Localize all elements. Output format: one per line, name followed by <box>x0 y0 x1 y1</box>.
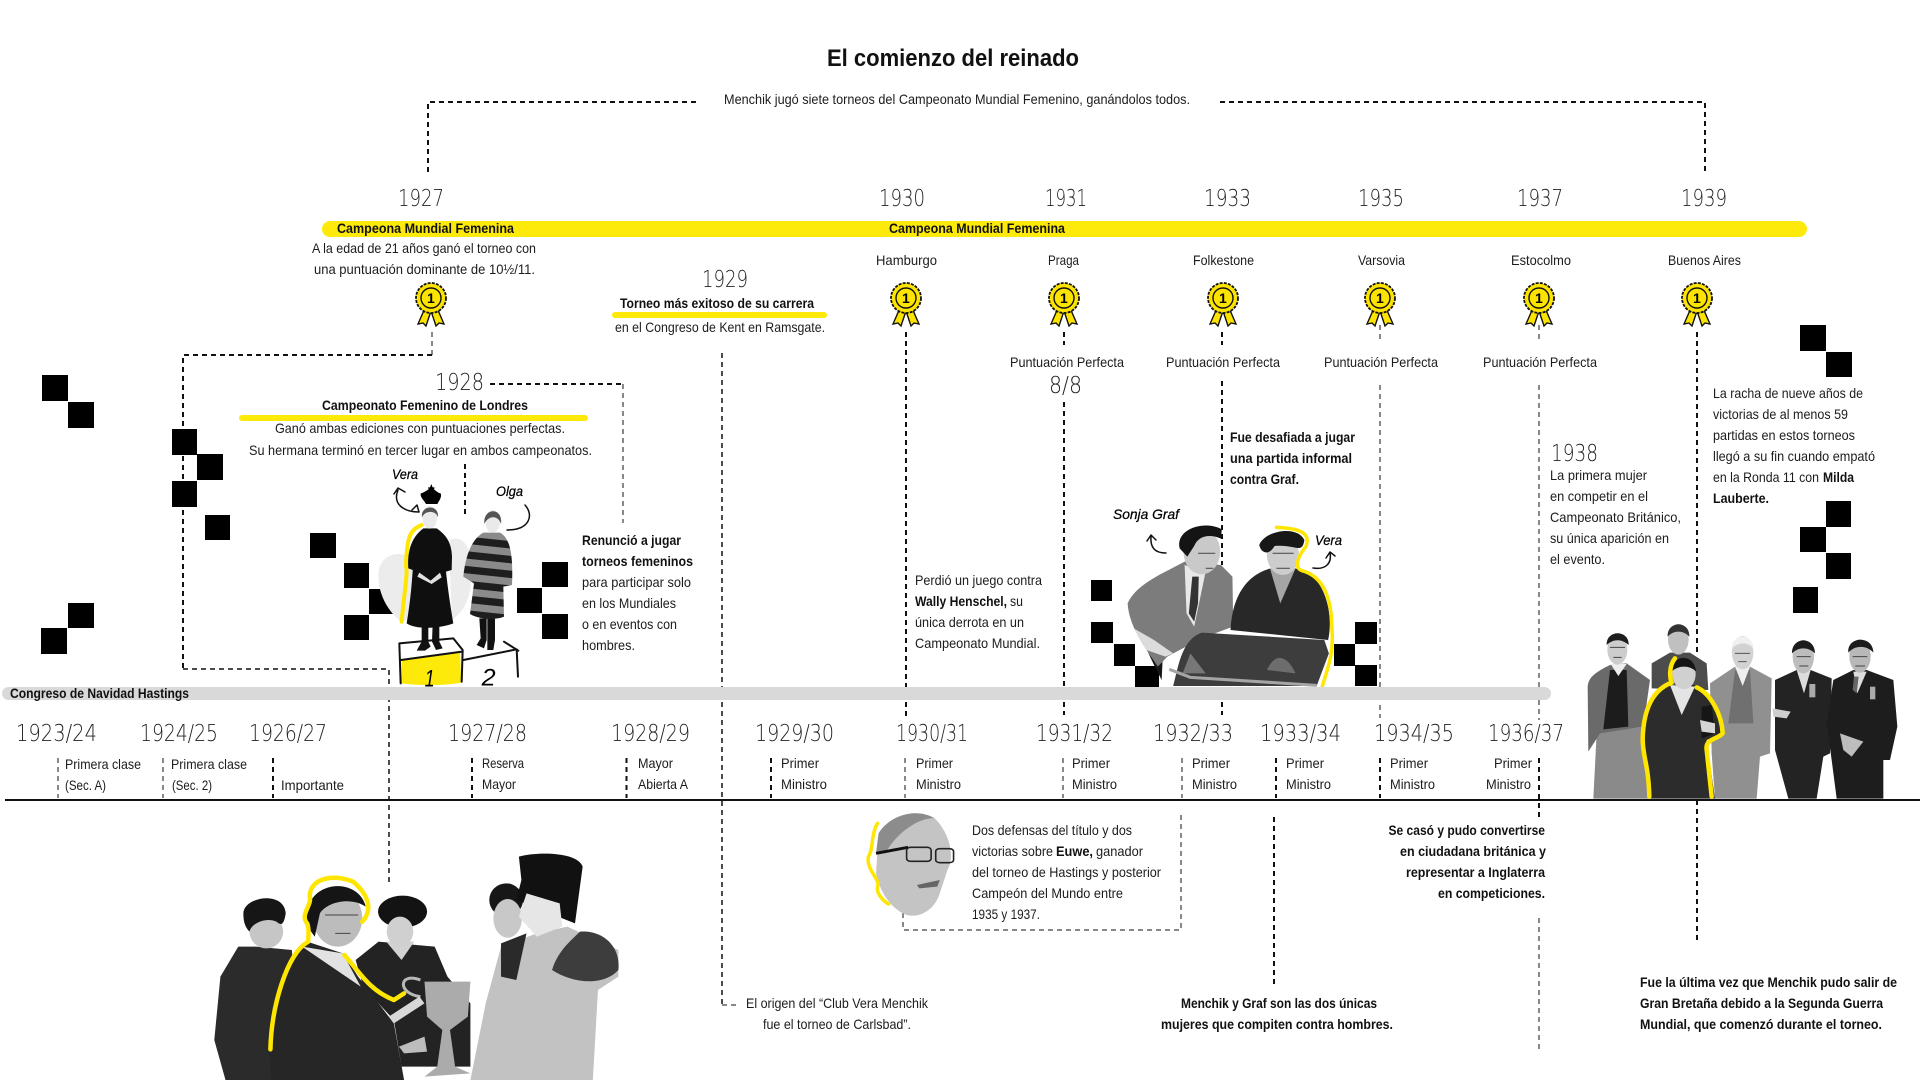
perfect score labels: Puntuación Perfecta <box>1166 354 1280 370</box>
text: nine-year streak <box>1713 385 1875 506</box>
icon: medal 1931: 1 <box>1060 290 1068 306</box>
icon: medal 1939: 1 <box>1693 290 1701 306</box>
figure: woman right of Vera <box>356 896 470 1067</box>
figure: man right <box>1827 639 1897 799</box>
season result labels: Mayor <box>638 755 673 771</box>
figure: Sonja Graf <box>1128 526 1233 680</box>
dashed connectors <box>183 325 1697 1053</box>
season result labels: Importante <box>281 777 344 793</box>
title: El comienzo del reinado <box>827 45 1079 72</box>
photo: group of six chess players <box>1588 624 1897 799</box>
text: nine-year streak: victorias de al menos 59 <box>1713 406 1848 422</box>
text: 1927 description: una puntuación dominante de 10½/11. <box>314 261 535 277</box>
block: 1928 London championship: Ganó ambas ediciones con puntuaciones perfectas. <box>275 420 565 436</box>
text: gave up women's tournaments: torneos femeninos <box>582 553 693 569</box>
text: gave up women's tournaments: en los Mundiales <box>582 595 676 611</box>
season result labels: Ministro <box>1286 776 1331 792</box>
icon: medal 1933 <box>1208 283 1238 326</box>
season result labels: Ministro <box>1390 776 1435 792</box>
icon: medal 1930: 1 <box>902 290 910 306</box>
season year labels: 1933/34 <box>1260 721 1341 747</box>
season year labels: 1927/28 <box>448 721 527 747</box>
icon: chess queen crown <box>421 484 441 504</box>
season result labels: Ministro <box>1072 776 1117 792</box>
text: lost one game: su <box>1010 593 1023 609</box>
text: 1938 British Championship: Campeonato Británico, <box>1550 509 1681 525</box>
text: lost one game: Campeonato Mundial. <box>915 635 1040 651</box>
icon: medal 1927 <box>416 283 446 326</box>
season result dividers <box>58 758 1539 798</box>
photo: Vera and Olga on the podium <box>378 506 518 693</box>
top year labels <box>398 186 1727 212</box>
text: Euwe victories: Dos defensas del título y dos <box>972 822 1132 838</box>
yellow bar: Campeona Mundial Femenina <box>322 220 1807 237</box>
text: Euwe victories: victorias sobre <box>972 843 1053 859</box>
text: British citizenship: en competiciones. <box>1438 885 1545 901</box>
text: nine-year streak: La racha de nueve años de <box>1713 385 1863 401</box>
text: lost one game <box>915 572 1042 651</box>
figure: trophy <box>389 978 470 1077</box>
figure: man arms crossed <box>1773 640 1832 799</box>
figure: Vera highlighted <box>269 878 404 1080</box>
icon: medal 1935: 1 <box>1376 290 1384 306</box>
season year labels: 1932/33 <box>1153 721 1233 747</box>
hand label: Vera with arrow <box>1313 532 1342 568</box>
text: nine-year streak: Lauberte. <box>1713 490 1769 506</box>
text: Euwe victories <box>972 822 1161 922</box>
city labels: Praga <box>1048 252 1079 268</box>
text: 1938 British Championship: La primera mujer <box>1550 467 1647 483</box>
checker squares <box>41 325 1852 687</box>
season result labels: (Sec. 2) <box>172 777 212 793</box>
icon: medal 1937 <box>1524 283 1554 326</box>
grey bar: Congreso de Navidad Hastings <box>2 685 1551 701</box>
top year labels: 1935 <box>1358 186 1404 212</box>
icon: medal 1931 <box>1049 283 1079 326</box>
season result labels: Abierta A <box>638 776 689 792</box>
season year labels: 1936/37 <box>1488 721 1564 747</box>
perfect score labels: Puntuación Perfecta <box>1010 354 1124 370</box>
season year labels: 1923/24 <box>16 721 97 747</box>
top year labels: 1937 <box>1517 186 1563 212</box>
icon: medal 1933: 1 <box>1219 290 1227 306</box>
text: Menchik and Graf: Menchik y Graf son las dos únicas <box>1181 995 1377 1011</box>
text: last time abroad: Mundial, que comenzó durante el torneo. <box>1640 1016 1882 1032</box>
text: gave up women's tournaments: para participar solo <box>582 574 691 590</box>
top year labels: 1931 <box>1045 186 1087 212</box>
figure: Olga <box>463 510 512 650</box>
season result labels: Primer <box>1286 755 1324 771</box>
text: 1938 British Championship: en competir en el <box>1550 488 1648 504</box>
text: last time abroad: Gran Bretaña debido a la Segunda Guerra <box>1640 995 1883 1011</box>
season result labels: Ministro <box>1486 776 1531 792</box>
text: British citizenship: Se casó y pudo convertirse <box>1388 822 1545 838</box>
season year labels: 1924/25 <box>140 721 218 747</box>
text: nine-year streak: Milda <box>1823 469 1854 485</box>
figure: woman behind right <box>489 883 523 938</box>
text: gave up women's tournaments: Renunció a jugar <box>582 532 681 548</box>
icon: medal 1935 <box>1365 283 1395 326</box>
text: lost one game: única derrota en un <box>915 614 1024 630</box>
icon: medal 1927: 1 <box>427 290 435 306</box>
season result labels: Ministro <box>781 776 827 792</box>
text: nine-year streak: partidas en estos torneos <box>1713 427 1855 443</box>
season result labels: Primer <box>1072 755 1110 771</box>
text: 1927 description <box>312 240 536 277</box>
text: British citizenship: en ciudadana británica y <box>1400 843 1546 859</box>
grey bar: Congreso de Navidad Hastings: Congreso de Navidad Hastings <box>10 685 189 701</box>
perfect score labels: Puntuación Perfecta <box>1324 354 1438 370</box>
figure: Vera highlighted <box>1643 658 1723 799</box>
season result labels: Primera clase <box>65 756 141 772</box>
text: 1938 British Championship: 1938 <box>1551 441 1598 467</box>
text: nine-year streak: en la Ronda 11 con <box>1713 469 1819 485</box>
top year labels: 1930 <box>879 186 925 212</box>
baseline rule <box>5 799 1920 801</box>
season year labels: 1930/31 <box>896 721 968 747</box>
yellow bar: Campeona Mundial Femenina: Campeona Mundial Femenina <box>337 220 514 236</box>
photo: women with trophy <box>214 854 619 1080</box>
connector: subtitle bracket <box>428 102 1705 176</box>
season year labels: 1926/27 <box>249 721 327 747</box>
block: 1929 Kent congress: 1929 <box>702 267 748 293</box>
season result labels: Primer <box>1494 755 1532 771</box>
text: 1938 British Championship <box>1550 441 1681 567</box>
season year labels: 1934/35 <box>1374 721 1454 747</box>
figure: Vera <box>407 506 453 651</box>
photo: Euwe head <box>868 813 954 916</box>
text: Club Vera Menchik origin: El origen del “Club Vera Menchik <box>746 995 929 1011</box>
text: last time abroad <box>1640 974 1897 1032</box>
perfect score labels: Puntuación Perfecta <box>1483 354 1597 370</box>
text: gave up women's tournaments: hombres. <box>582 637 635 653</box>
text: challenged to informal game: una partida informal <box>1230 450 1352 466</box>
city labels: Buenos Aires <box>1668 252 1741 268</box>
text: British citizenship: representar a Inglaterra <box>1406 864 1545 880</box>
text: Menchik and Graf <box>1161 995 1393 1032</box>
block: 1929 Kent congress: en el Congreso de Kent en Ramsgate. <box>615 319 825 335</box>
text: Menchik and Graf: mujeres que compiten contra hombres. <box>1161 1016 1393 1032</box>
city labels: Varsovia <box>1358 252 1405 268</box>
podium <box>399 638 518 693</box>
subtitle: seven world championships: Menchik jugó siete torneos del Campeonato Mundial Femenino, ganándolos todos. <box>724 91 1190 107</box>
block: 1928 London championship <box>239 370 592 458</box>
figure: woman with tall hat <box>470 854 619 1080</box>
figure: man with glasses <box>1588 633 1650 799</box>
season result labels: Ministro <box>1192 776 1237 792</box>
text: lost one game: Perdió un juego contra <box>915 572 1042 588</box>
top year labels: 1927 <box>398 186 444 212</box>
hand label: Vera with arrow: Vera <box>1315 532 1342 548</box>
city labels: Folkestone <box>1193 252 1254 268</box>
photo: Sonja Graf and Vera at table <box>1128 526 1332 686</box>
hand label: Sonja Graf with arrow: Sonja Graf <box>1113 506 1181 522</box>
text: British citizenship <box>1388 822 1546 901</box>
season result labels: Ministro <box>916 776 961 792</box>
podium: 1 <box>425 666 435 693</box>
hand label: Vera with arrow <box>392 466 419 512</box>
yellow bar: Campeona Mundial Femenina: Campeona Mundial Femenina <box>889 220 1065 236</box>
season result labels: Primer <box>1192 755 1230 771</box>
season result labels: Mayor <box>482 776 516 792</box>
text: nine-year streak: llegó a su fin cuando empató <box>1713 448 1875 464</box>
season year labels: 1929/30 <box>755 721 834 747</box>
text: challenged to informal game: Fue desafiada a jugar <box>1230 429 1355 445</box>
city labels: Hamburgo <box>876 252 937 268</box>
block: 1928 London championship: Campeonato Femenino de Londres <box>322 397 528 413</box>
text: Euwe victories: del torneo de Hastings y posterior <box>972 864 1161 880</box>
text: Euwe victories: Euwe, <box>1056 843 1093 859</box>
block: 1929 Kent congress: Torneo más exitoso de su carrera <box>620 295 814 311</box>
season result labels <box>65 755 1532 793</box>
season year labels: 1928/29 <box>611 721 690 747</box>
block: 1928 London championship: 1928 <box>435 370 484 396</box>
block: 1928 London championship: Su hermana terminó en tercer lugar en ambos campeonatos. <box>249 442 592 458</box>
season year labels <box>16 721 1564 747</box>
block: 1929 Kent congress <box>612 267 827 335</box>
text: Euwe victories: ganador <box>1096 843 1143 859</box>
table <box>1169 633 1329 686</box>
top year labels: 1939 <box>1681 186 1727 212</box>
icon: medal 1930 <box>891 283 921 326</box>
text: Club Vera Menchik origin <box>746 995 929 1032</box>
season result labels: Primer <box>781 755 819 771</box>
figure: man behind <box>1652 624 1708 690</box>
text: Euwe victories: Campeón del Mundo entre <box>972 885 1123 901</box>
season result labels: Reserva <box>482 755 524 771</box>
season result labels: (Sec. A) <box>65 777 106 793</box>
text: lost one game: Wally Henschel, <box>915 593 1007 609</box>
season result labels: Primera clase <box>171 756 247 772</box>
text: gave up women's tournaments: o en eventos con <box>582 616 677 632</box>
hand label: Vera with arrow: Vera <box>392 466 418 482</box>
figure: Vera <box>1231 527 1332 686</box>
text: 1938 British Championship: su única aparición en <box>1550 530 1669 546</box>
text: Euwe victories: 1935 y 1937. <box>972 906 1040 922</box>
perfect score labels <box>1010 354 1597 399</box>
text: challenged to informal game: contra Graf. <box>1230 471 1299 487</box>
season result labels: Primer <box>1390 755 1428 771</box>
perfect score labels: 8/8 <box>1049 373 1082 399</box>
text: Club Vera Menchik origin: fue el torneo de Carlsbad”. <box>763 1016 911 1032</box>
text: gave up women's tournaments <box>582 532 693 653</box>
icon: medal 1937: 1 <box>1535 290 1543 306</box>
text: 1938 British Championship: el evento. <box>1550 551 1605 567</box>
text: challenged to informal game <box>1230 429 1355 487</box>
figure: woman far left <box>214 898 302 1080</box>
city labels <box>876 252 1741 268</box>
podium: 2 <box>481 664 496 691</box>
hand label: Sonja Graf with arrow <box>1113 506 1181 553</box>
icon: medal 1939 <box>1682 283 1712 326</box>
hand label: Olga with arrow: Olga <box>496 483 523 499</box>
top year labels: 1933 <box>1204 186 1251 212</box>
hand label: Olga with arrow <box>496 483 529 530</box>
text: 1927 description: A la edad de 21 años ganó el torneo con <box>312 240 536 256</box>
figure: man with white hair <box>1710 636 1772 799</box>
city labels: Estocolmo <box>1511 252 1571 268</box>
season result labels: Primer <box>916 755 953 771</box>
season year labels: 1931/32 <box>1036 721 1113 747</box>
